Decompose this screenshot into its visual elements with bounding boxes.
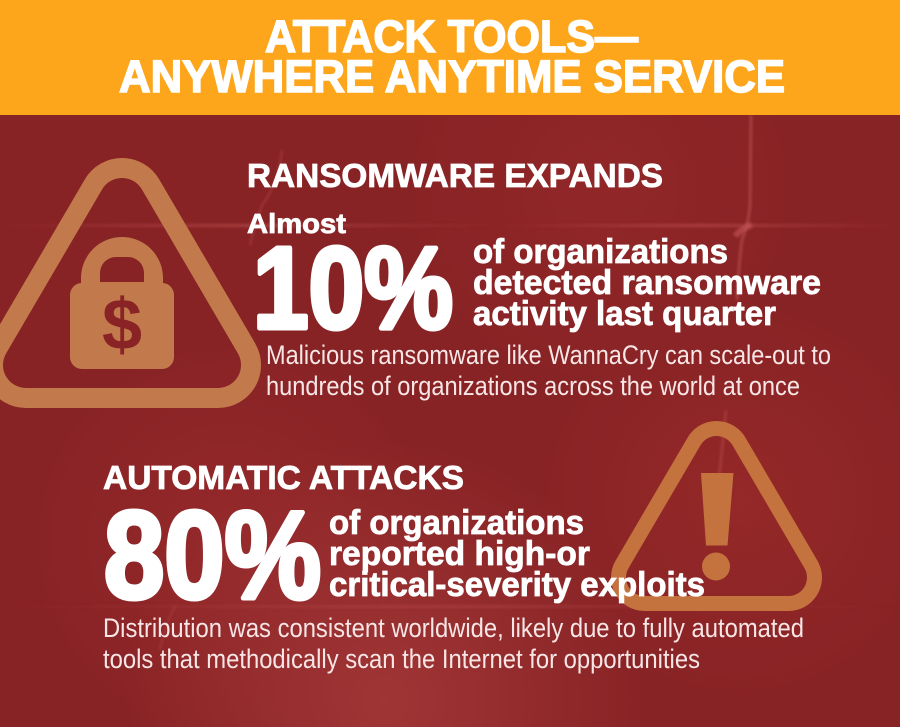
heading: automatic attacks: AUTOMATIC ATTACKS	[103, 459, 464, 496]
stat description: reported high-or	[329, 535, 590, 573]
stat description	[329, 504, 705, 604]
supporting text	[266, 340, 831, 401]
supporting text: hundreds of organizations across the world at once	[266, 371, 800, 401]
section: automatic attacks	[103, 459, 804, 674]
icon: padlock warning triangle: $	[102, 285, 142, 365]
section: ransomware expands	[247, 157, 831, 401]
supporting text: Distribution was consistent worldwide, likely due to fully automated	[103, 613, 804, 643]
stat: 10%: 10%	[253, 223, 453, 353]
label: almost: Almost	[247, 208, 346, 239]
stat description: detected ransomware	[473, 264, 821, 302]
title banner	[0, 0, 900, 115]
title: ATTACK TOOLS—	[265, 11, 638, 62]
stat description: critical-severity exploits	[329, 566, 705, 604]
supporting text	[103, 613, 804, 674]
icon: exclamation warning triangle	[619, 429, 814, 604]
stat description: activity last quarter	[473, 295, 776, 333]
title: ANYWHERE ANYTIME SERVICE	[119, 51, 785, 102]
title	[119, 11, 785, 102]
supporting text: tools that methodically scan the Internet for opportunities	[103, 644, 700, 674]
stat: 80%: 80%	[104, 487, 321, 625]
heading: ransomware expands: RANSOMWARE EXPANDS	[247, 157, 663, 194]
stat description	[473, 233, 821, 333]
stat description: of organizations	[329, 504, 584, 542]
supporting text: Malicious ransomware like WannaCry can scale-out to	[266, 340, 831, 370]
icon: padlock warning triangle	[0, 168, 251, 398]
stat description: of organizations	[473, 233, 728, 271]
